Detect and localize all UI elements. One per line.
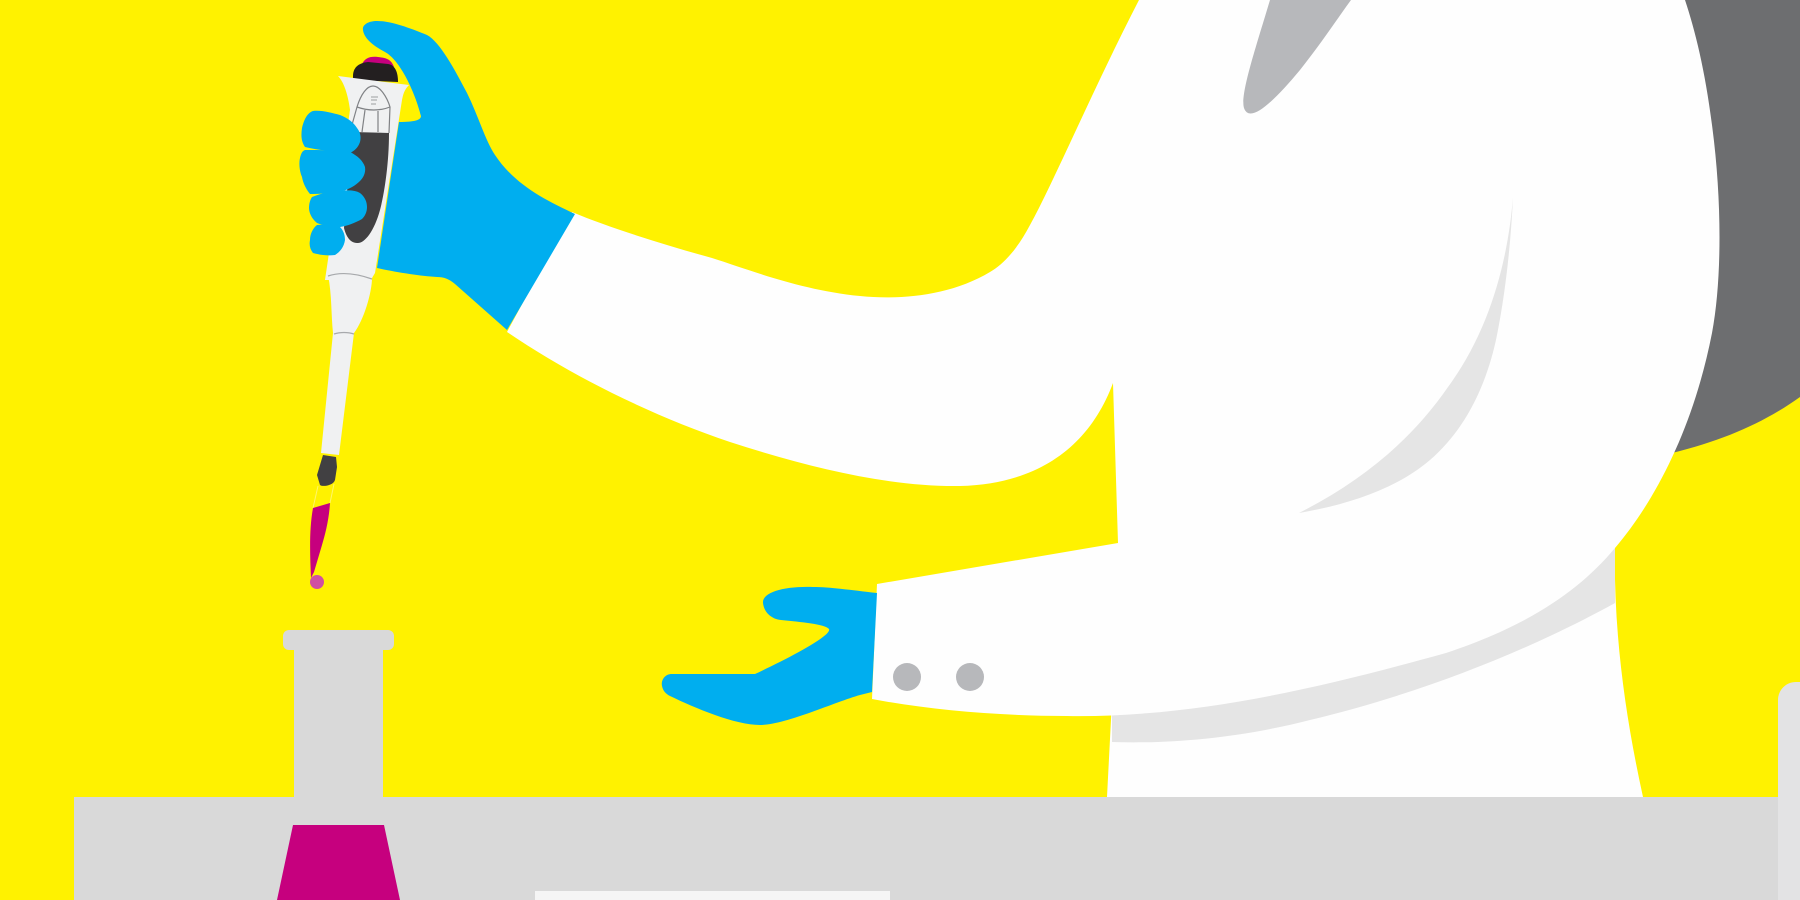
lab bench [74,797,1800,900]
liquid in tip [310,503,330,578]
flask [283,630,394,800]
cuff buttons [893,663,984,691]
plunger black cap [353,62,398,82]
pipette tip outline [313,484,334,508]
upper gloved hand: palm and thumb [363,21,575,330]
tip holder [317,455,337,486]
lab coat lower skirt [1107,540,1643,797]
pipette grip panel [344,132,389,243]
lab coat body and sleeves [507,0,1720,716]
falling drop [310,575,324,589]
fingers holding the pipette [299,111,367,255]
handle left side [325,110,380,280]
paper on bench [535,891,890,900]
handle rings [328,274,372,334]
pipette [310,57,409,589]
jar at right edge [1778,682,1800,900]
flask lip [283,630,394,650]
scientist's dark back garment [1660,0,1800,453]
lower gloved hand [662,587,877,725]
pipette handle body [321,76,409,455]
coat lapel fold [1243,0,1351,114]
chest fold shadow [1299,197,1513,513]
flask neck [294,640,383,800]
magenta liquid in flask [277,825,400,900]
plunger magenta top [362,57,394,67]
skirt shadow under the sleeve [1112,540,1615,742]
volume display outline [350,86,390,133]
